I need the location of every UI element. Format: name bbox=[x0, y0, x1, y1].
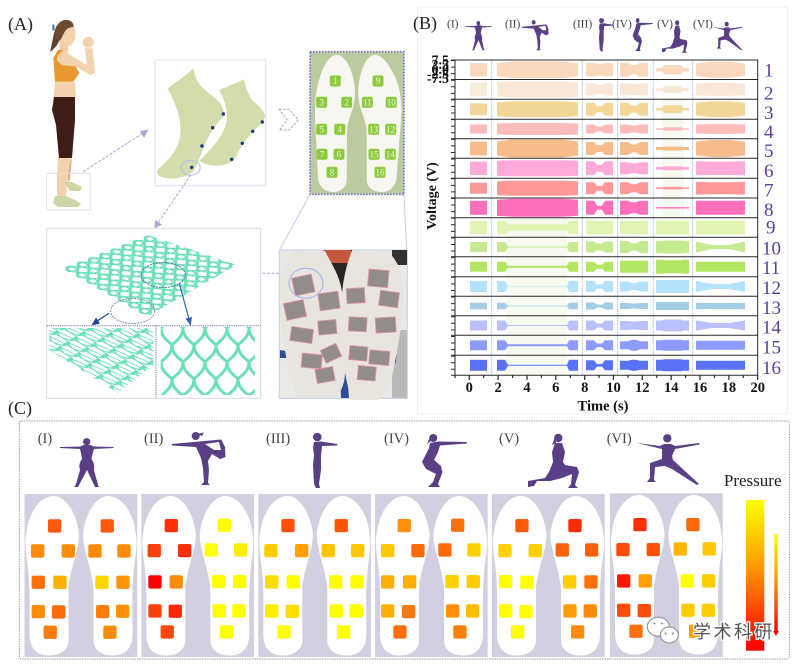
sensor row numbers: 9 bbox=[766, 218, 776, 238]
x-axis tick labels: 4 bbox=[523, 380, 531, 396]
trace row 14 bbox=[470, 320, 745, 332]
sensor numbers: 9 bbox=[376, 76, 381, 86]
highlight ellipse bbox=[289, 268, 323, 298]
trace row 11 bbox=[470, 260, 745, 274]
y-axis tick labels: 7.5 bbox=[432, 54, 449, 68]
heading: panel C label: (C) bbox=[8, 398, 32, 419]
sensor numbers: 4 bbox=[337, 124, 342, 134]
pose labels row B: (I) bbox=[447, 18, 459, 30]
icon: pose II bbox=[172, 432, 226, 485]
arrow: sock to fabric bbox=[154, 175, 191, 228]
detail ellipses bbox=[141, 262, 185, 288]
watermark: text: 学术科研 bbox=[693, 622, 775, 642]
top view mesh bbox=[161, 327, 255, 395]
right sole bbox=[358, 55, 402, 192]
heading: panel A label: (A) bbox=[8, 14, 33, 35]
x-axis tick labels: 6 bbox=[552, 380, 559, 396]
sensor dots bbox=[190, 112, 264, 169]
sensor row numbers: 5 bbox=[764, 141, 774, 162]
right sock bbox=[341, 250, 404, 400]
trace row 7 bbox=[470, 181, 745, 196]
x-axis tick labels: 16 bbox=[693, 380, 707, 396]
sensor row numbers: 12 bbox=[762, 278, 781, 299]
y-axis title: Voltage (V) bbox=[425, 162, 440, 230]
sensor row numbers bbox=[762, 60, 782, 379]
icon: pose III small bbox=[599, 18, 613, 51]
sensor row numbers: 13 bbox=[762, 298, 781, 319]
left sole bbox=[315, 55, 355, 192]
trace row 13 bbox=[470, 302, 745, 310]
colorbar: pressure scale bbox=[746, 500, 764, 651]
pose labels row C: (II) bbox=[144, 431, 163, 447]
left sock bbox=[280, 250, 345, 398]
pose labels row B: (II) bbox=[505, 18, 520, 30]
icon: pose IV small bbox=[633, 18, 653, 51]
sensor row numbers: 2 bbox=[764, 84, 774, 104]
detail arrow right bbox=[179, 283, 192, 326]
x-axis tick labels: 2 bbox=[494, 380, 502, 396]
pose labels row C: (V) bbox=[499, 431, 519, 447]
y-axis tick labels: 2.5 bbox=[432, 58, 449, 73]
panel: socks with sensors bbox=[155, 60, 266, 186]
trace row 3 bbox=[470, 101, 745, 117]
sensor numbers: 7 bbox=[320, 149, 325, 159]
sensor row numbers: 3 bbox=[764, 103, 774, 124]
pose labels row C: (IV) bbox=[384, 431, 409, 447]
illustration: standing woman bbox=[50, 20, 95, 207]
trace row 1 bbox=[470, 62, 745, 78]
pose labels row B: (VI) bbox=[693, 18, 713, 30]
x-axis ticks bbox=[455, 375, 758, 380]
photo: socks with textile sensors bbox=[279, 250, 407, 400]
textile sensor patches bbox=[283, 269, 399, 383]
numbered sensor squares bbox=[316, 76, 397, 178]
chart: voltage traces of 16 sensors bbox=[451, 60, 758, 380]
sensor numbers: 2 bbox=[344, 97, 349, 107]
sensor row numbers: 8 bbox=[764, 200, 774, 221]
trace row 12 bbox=[470, 280, 745, 293]
icon: pose I small bbox=[465, 21, 492, 50]
icon: pose V small bbox=[662, 20, 688, 53]
heatmap panel: pose VI bbox=[610, 493, 723, 657]
trace row 9 bbox=[470, 220, 745, 234]
trace row 15 bbox=[470, 340, 745, 351]
trace row 16 bbox=[470, 359, 745, 371]
sensor row numbers: 16 bbox=[762, 358, 781, 379]
sensor row numbers: 7 bbox=[764, 180, 774, 202]
sensor numbers: 12 bbox=[386, 124, 395, 134]
front view mesh bbox=[49, 328, 153, 393]
panel: insole sensor layout bbox=[310, 52, 404, 194]
pose dividers bbox=[492, 60, 693, 375]
heading: panel B label: (B) bbox=[413, 13, 437, 34]
sensor numbers: 5 bbox=[319, 124, 324, 134]
trace row 8 bbox=[470, 199, 745, 217]
trace row 10 bbox=[470, 240, 745, 254]
x-axis tick labels: 12 bbox=[635, 380, 650, 396]
left sock bbox=[157, 68, 224, 178]
heatmap panel: pose V bbox=[492, 494, 605, 657]
pose labels row C: (VI) bbox=[607, 431, 632, 447]
icon: pose V bbox=[528, 434, 579, 488]
icon: pose IV bbox=[422, 434, 467, 487]
sensor row numbers: 15 bbox=[762, 338, 781, 358]
x-axis tick labels: 0 bbox=[466, 380, 473, 396]
panel: knitted fabric structure bbox=[47, 228, 261, 398]
trace row 2 bbox=[470, 81, 745, 97]
pose labels row B: (IV) bbox=[612, 18, 632, 30]
sensor numbers: 6 bbox=[337, 149, 342, 159]
trace row 4 bbox=[470, 123, 745, 135]
pose labels row B: (V) bbox=[657, 18, 673, 30]
pose labels row B bbox=[447, 18, 713, 30]
row grid and frame bbox=[451, 60, 758, 375]
sensor numbers: 3 bbox=[319, 97, 324, 107]
highlight ellipse bbox=[181, 160, 200, 175]
sensor numbers: 8 bbox=[330, 167, 335, 177]
pose labels row B: (III) bbox=[573, 18, 592, 30]
x-axis tick labels: 18 bbox=[722, 380, 736, 396]
pose labels row C: (I) bbox=[38, 431, 52, 447]
watermark: WeChat icon bbox=[647, 617, 678, 643]
icon: pose II small bbox=[522, 20, 549, 50]
sensor row numbers: 14 bbox=[762, 318, 782, 338]
y-axis tick labels bbox=[427, 54, 449, 87]
icon: pose III bbox=[313, 433, 338, 488]
x-axis tick labels bbox=[466, 380, 765, 396]
sensor numbers: 14 bbox=[386, 149, 395, 159]
connector lines: insole to photo bbox=[280, 194, 407, 249]
x-axis tick labels: 8 bbox=[581, 380, 588, 396]
y-axis tick labels: -2.5 bbox=[427, 68, 449, 82]
callout box: feet of woman bbox=[47, 173, 90, 210]
heatmap panel: pose III bbox=[258, 494, 371, 657]
sensor row numbers: 1 bbox=[764, 60, 774, 82]
y-axis ticks bbox=[451, 60, 455, 375]
x-axis title: Time (s) bbox=[578, 399, 629, 415]
sensor numbers: 11 bbox=[363, 97, 372, 107]
x-axis tick labels: 10 bbox=[606, 380, 621, 396]
dividers bbox=[47, 326, 261, 398]
y-axis tick labels: 0.0 bbox=[432, 63, 449, 78]
heatmap panel: pose II bbox=[141, 494, 254, 657]
sensor numbers: 1 bbox=[333, 76, 338, 86]
arrow: feet to socks bbox=[83, 130, 148, 172]
fabric mesh bbox=[62, 235, 237, 317]
sensor row numbers: 4 bbox=[764, 122, 774, 143]
sensor row numbers: 10 bbox=[762, 238, 781, 260]
icon: pose VI bbox=[637, 434, 700, 485]
arrow: chevron to insole bbox=[279, 109, 298, 130]
arrow: pressure direction bbox=[773, 534, 779, 636]
heatmap panel: pose IV bbox=[375, 494, 488, 657]
pose labels row C: (III) bbox=[266, 431, 290, 447]
y-axis tick labels: -7.5 bbox=[427, 72, 449, 87]
icon: pose VI small bbox=[712, 22, 742, 50]
panel: B background bbox=[418, 7, 788, 414]
x-axis tick labels: 14 bbox=[664, 380, 678, 396]
pale background zones bbox=[506, 99, 684, 375]
trace row 5 bbox=[470, 140, 745, 158]
heatmap panel: pose I bbox=[24, 494, 137, 657]
sensor numbers: 13 bbox=[369, 124, 379, 134]
right sock bbox=[200, 79, 265, 166]
sensor numbers: 15 bbox=[370, 149, 379, 159]
sensor row numbers: 11 bbox=[762, 258, 780, 279]
arrow: photo to fabric bbox=[240, 270, 279, 277]
legend title: Pressure bbox=[724, 471, 782, 490]
sensor row numbers: 6 bbox=[764, 161, 774, 182]
panel: C dotted frame bbox=[19, 421, 789, 659]
pose labels row C bbox=[38, 431, 632, 447]
sensor numbers: 10 bbox=[387, 97, 396, 107]
trace row 6 bbox=[470, 160, 745, 176]
x-axis tick labels: 20 bbox=[750, 380, 765, 396]
detail arrow left bbox=[92, 313, 109, 326]
icon: pose I bbox=[60, 438, 114, 487]
sensor numbers: 16 bbox=[376, 167, 385, 177]
sensor numbers bbox=[319, 76, 396, 177]
